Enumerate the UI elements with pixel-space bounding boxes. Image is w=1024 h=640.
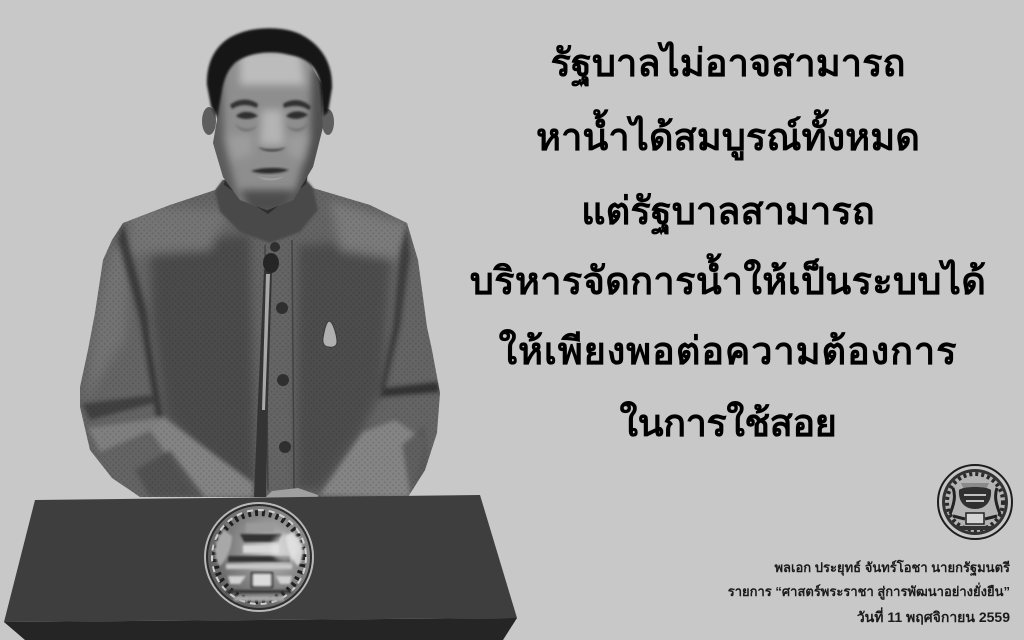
quote text: ให้เพียงพอต่อความต้องการ <box>499 331 957 373</box>
podium seal <box>204 502 314 612</box>
speaker credit: วันที่ 11 พฤศจิกายน 2559 <box>857 609 1010 625</box>
lapel badge <box>323 321 337 347</box>
quote text: แต่รัฐบาลสามารถ <box>581 191 875 233</box>
suit body <box>70 170 450 500</box>
collar <box>215 178 318 243</box>
mouth <box>251 168 289 174</box>
speaker credit: พลเอก ประยุทธ์ จันทร์โอชา นายกรัฐมนตรี <box>774 560 1010 575</box>
eyes <box>236 112 258 119</box>
quote text: ในการใช้สอย <box>620 403 836 445</box>
quote text <box>470 41 986 445</box>
government emblem <box>938 465 1012 539</box>
speaker credit: รายการ “ศาสตร์พระราชา สู่การพัฒนาอย่างยั่งยืน” <box>728 584 1010 599</box>
person <box>70 28 450 500</box>
face <box>213 52 323 210</box>
quote text: รัฐบาลไม่อาจสามารถ <box>550 43 906 85</box>
buttons <box>270 242 291 453</box>
neck <box>224 155 312 214</box>
microphone <box>254 253 279 497</box>
placket lines <box>265 240 294 490</box>
head <box>202 28 334 215</box>
hands <box>266 488 318 497</box>
speaker credit <box>728 560 1010 625</box>
hair <box>207 28 332 118</box>
brows <box>230 100 258 109</box>
nose <box>258 147 286 152</box>
quote text: บริหารจัดการน้ำให้เป็นระบบได้ <box>470 261 986 303</box>
ears <box>202 107 216 135</box>
podium front <box>4 495 517 622</box>
quote text: หาน้ำได้สมบูรณ์ทั้งหมด <box>536 117 920 159</box>
podium <box>4 495 517 640</box>
podium underside <box>4 618 517 640</box>
